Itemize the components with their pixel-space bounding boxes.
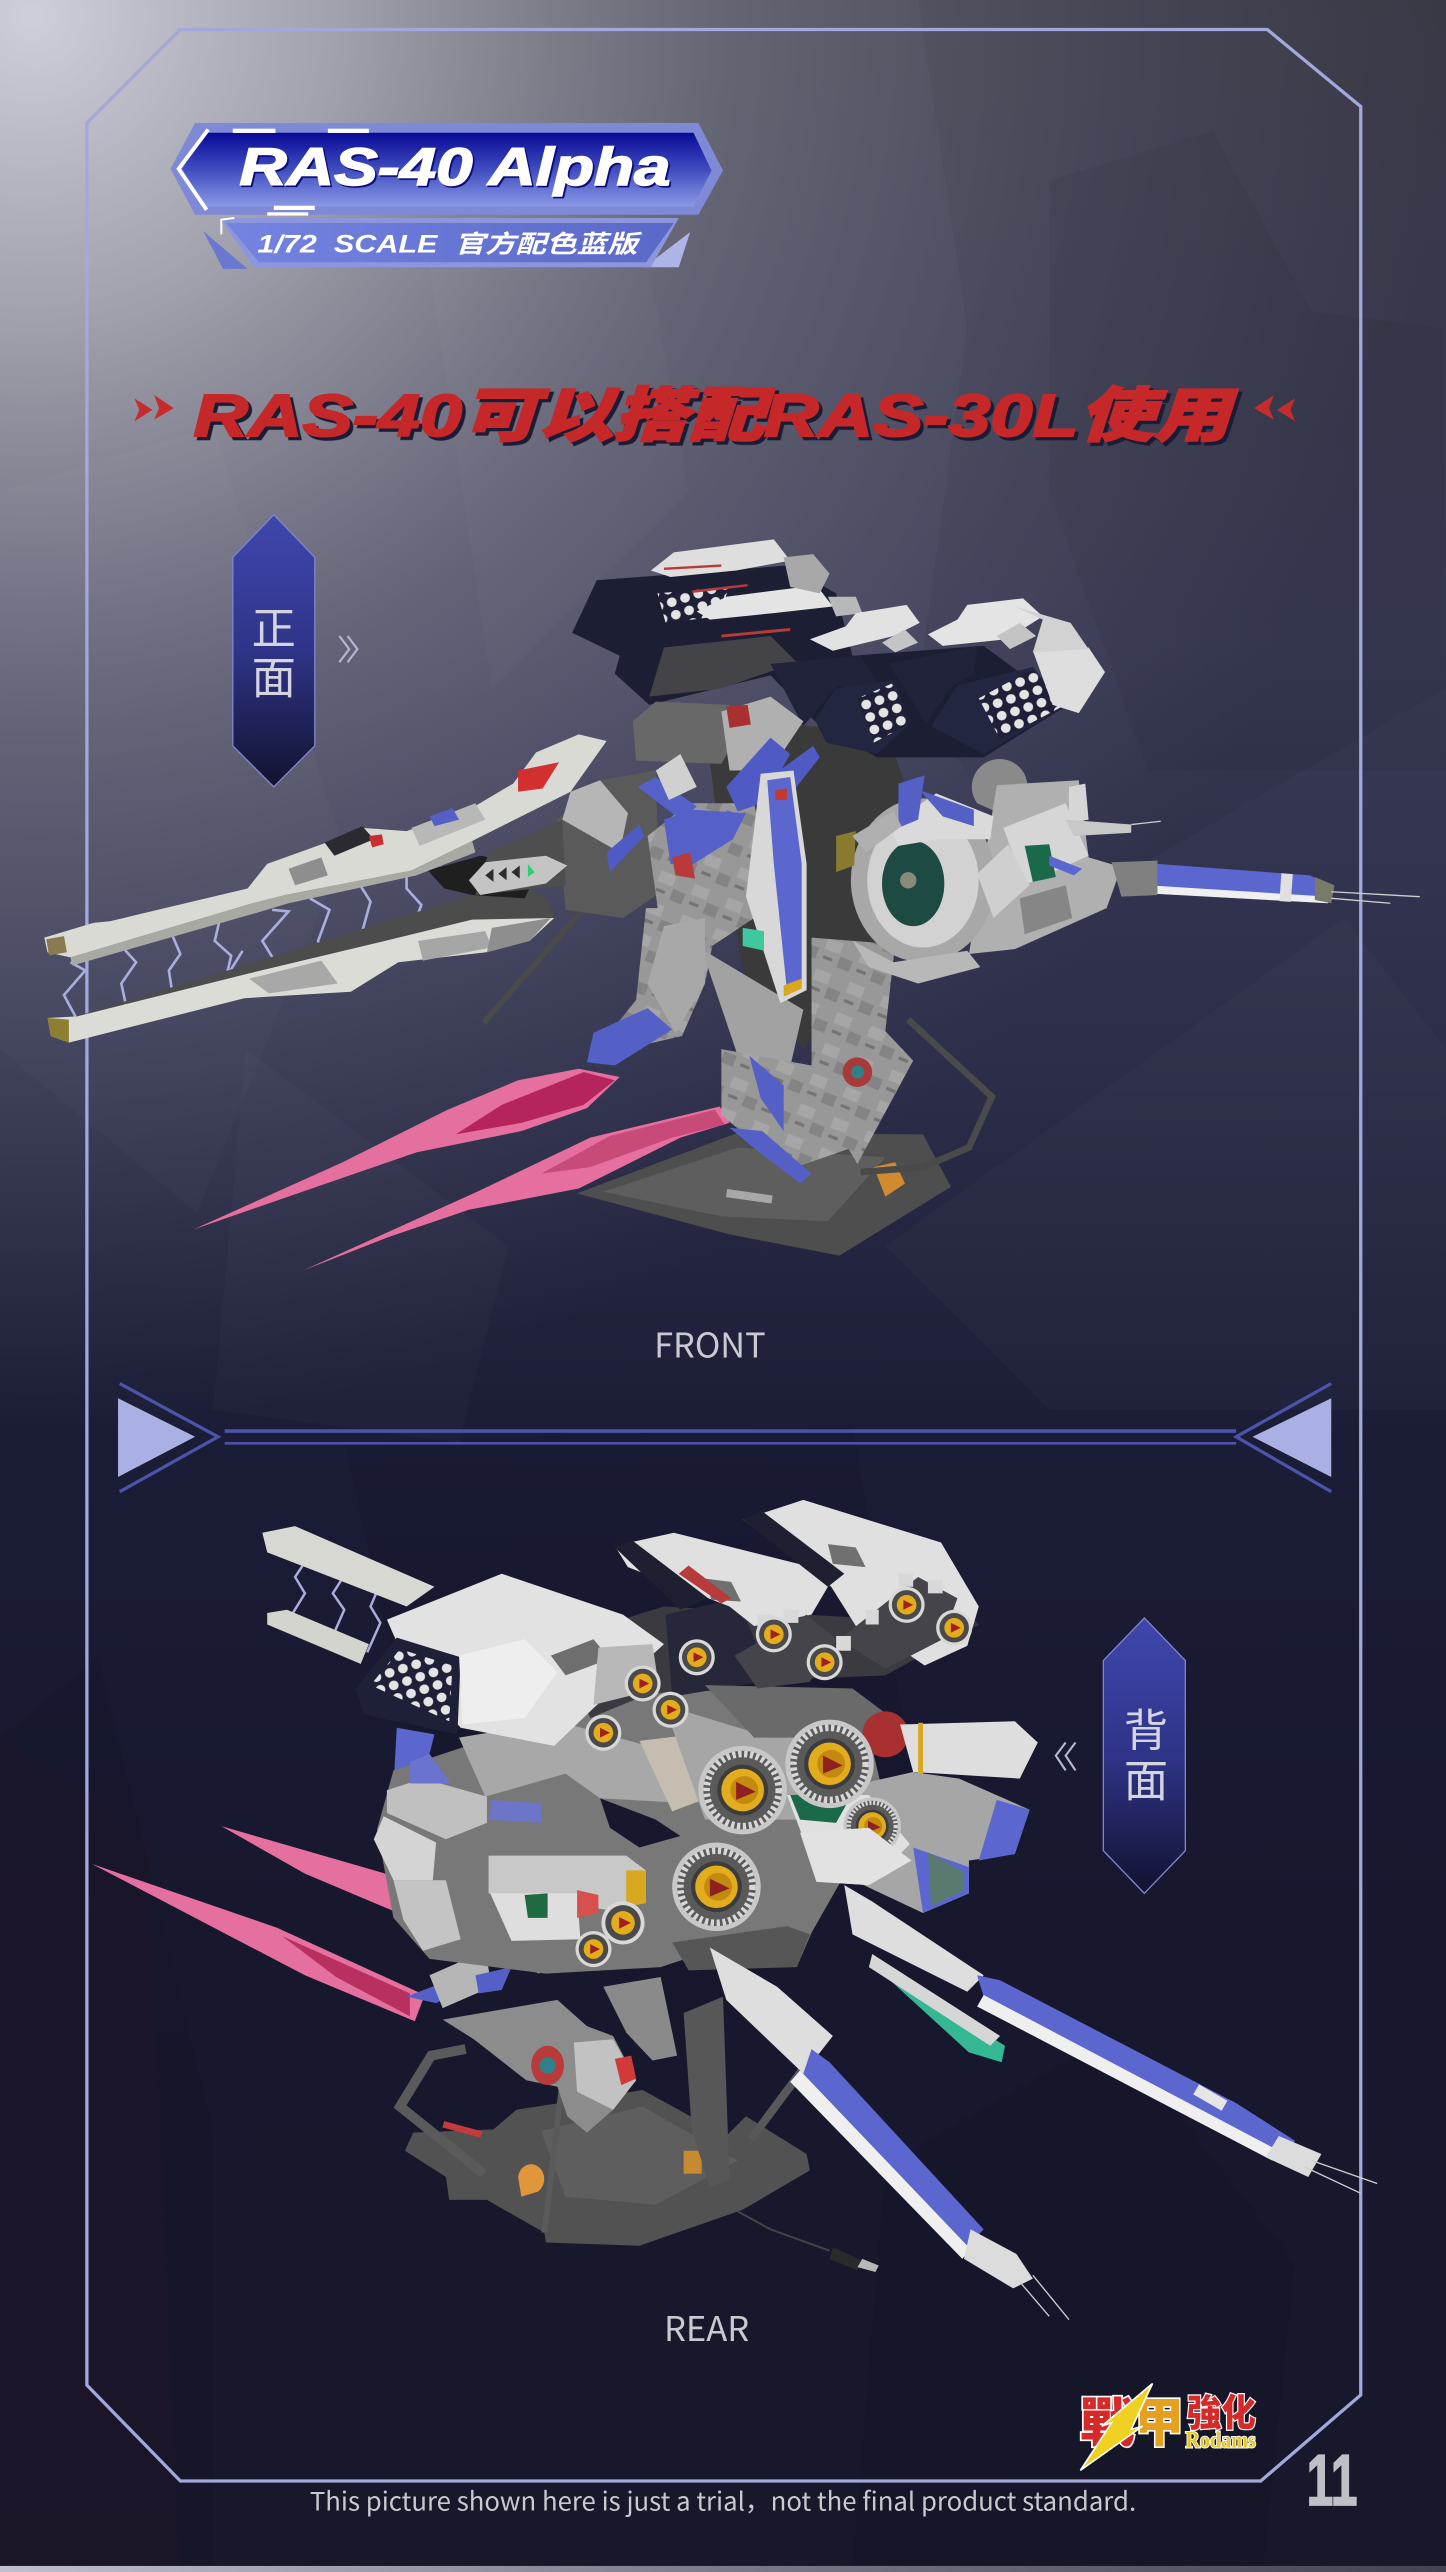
brand logo: Rodams — [1185, 2427, 1256, 2452]
missile pods front — [771, 598, 1105, 754]
rifle upper and housing — [44, 734, 628, 966]
rifle lower — [48, 885, 554, 1043]
gun-to-body connector — [557, 770, 659, 918]
pink thruster flames — [193, 1069, 730, 1270]
title text: RAS-40 Alpha — [239, 139, 671, 197]
lightning effects — [64, 870, 421, 1016]
rear flames — [92, 1826, 425, 2021]
rear engine nozzles — [575, 1587, 972, 1967]
rear rifle stubs — [262, 1526, 434, 1664]
arrow: points to front view — [339, 636, 357, 662]
heading left chevrons — [134, 395, 174, 421]
disclaimer: This picture shown here is just a trial，not the final product standard. — [310, 2483, 1136, 2519]
rear view model — [92, 1500, 1377, 2320]
page number: 11 — [1307, 2441, 1357, 2521]
blue barrels — [1049, 820, 1420, 903]
subtitle text: 1/72 SCALE 官方配色蓝版 — [257, 230, 643, 258]
mecha torso and shield — [607, 697, 820, 1033]
arrow: points to rear view — [1056, 1743, 1075, 1770]
heading — [134, 383, 1295, 449]
disc thruster — [836, 775, 1030, 984]
rear missile pod cores — [557, 1565, 979, 1738]
support arm — [861, 1020, 992, 1172]
FRONT label: FRONT — [654, 1317, 766, 1367]
spear — [484, 880, 608, 1023]
rear badge: 背 — [1124, 1695, 1168, 1759]
right side thruster unit — [969, 759, 1121, 954]
legs — [587, 908, 913, 1184]
section divider — [118, 1384, 1331, 1492]
front badge: 正 — [252, 593, 296, 657]
rear core body — [374, 1688, 885, 1974]
bottom edge strip — [0, 2566, 1446, 2572]
rear left missile pod — [356, 1574, 664, 1746]
rear supports and pillar — [400, 1997, 803, 2233]
rear base platform — [405, 2090, 810, 2246]
brand logo — [1080, 2381, 1256, 2470]
front view model — [44, 539, 1420, 1270]
pods dark backing — [572, 566, 1066, 757]
back torso — [705, 721, 918, 1049]
brand logo: 戰 — [1080, 2381, 1135, 2457]
REAR label: REAR — [664, 2301, 749, 2351]
base platform — [577, 1133, 951, 1256]
rear white shells — [613, 1500, 979, 1688]
brand logo: 強化 — [1187, 2382, 1256, 2437]
front badge — [233, 515, 315, 787]
rear badge: 面 — [1124, 1746, 1168, 1810]
rear barrels — [710, 1885, 1377, 2320]
rear lightning — [292, 1557, 380, 1652]
heading text: RAS-40可以搭配RAS-30L使用 — [193, 383, 1239, 449]
under-pod grey box — [633, 702, 734, 764]
front badge: 面 — [252, 642, 296, 706]
title badge — [171, 123, 723, 216]
rear leg and knee — [407, 1939, 677, 2133]
usb cable — [738, 2211, 879, 2272]
heading right chevrons — [1254, 395, 1295, 421]
brand logo: 甲 — [1135, 2381, 1184, 2457]
rear tank and arm — [787, 1711, 1038, 1913]
subtitle badge — [203, 218, 690, 269]
rear badge — [1103, 1618, 1185, 1893]
missile pods rear — [649, 539, 862, 697]
